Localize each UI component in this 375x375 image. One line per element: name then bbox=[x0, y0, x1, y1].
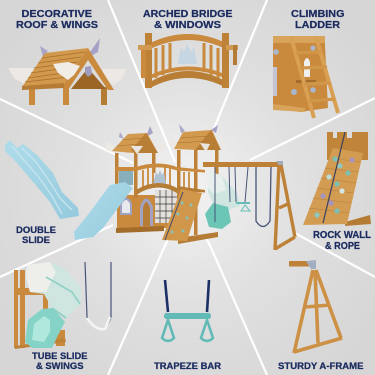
heading: decorative roof and wings bbox=[16, 9, 98, 31]
panel: tube slide and swings bbox=[14, 262, 111, 371]
heading: rock wall and rope bbox=[313, 230, 371, 252]
tube slide bbox=[205, 170, 240, 229]
icon: roof with wings bbox=[8, 38, 127, 105]
icon: rock wall bbox=[303, 132, 371, 226]
heading: double slide bbox=[16, 225, 57, 246]
heading: decorative roof and wings: DECORATIVE bbox=[22, 9, 92, 20]
heading: sturdy a-frame: STURDY A-FRAME bbox=[278, 361, 364, 371]
icon: trapeze bar bbox=[162, 280, 213, 341]
icon: double slide bbox=[5, 140, 79, 219]
heading: climbing ladder: LADDER bbox=[295, 20, 341, 31]
panel: decorative roof and wings bbox=[8, 9, 127, 105]
heading: rock wall and rope: ROCK WALL bbox=[313, 230, 371, 241]
roofs bbox=[105, 124, 227, 154]
heading: climbing ladder: CLIMBING bbox=[291, 9, 345, 20]
icon: ladder and wall bbox=[273, 36, 338, 118]
panel: sturdy a-frame bbox=[278, 260, 364, 371]
panel: arched bridge and windows bbox=[138, 9, 238, 88]
icon: swing bbox=[85, 262, 111, 329]
heading: arched bridge and windows bbox=[143, 9, 233, 31]
panel: rock wall and rope bbox=[303, 132, 371, 252]
heading: arched bridge and windows: ARCHED BRIDGE bbox=[143, 9, 233, 20]
heading: double slide: DOUBLE bbox=[16, 225, 57, 236]
bridge railing bbox=[116, 164, 205, 195]
panel: trapeze bar bbox=[154, 280, 221, 371]
panel: climbing ladder bbox=[273, 9, 345, 118]
icon: tube slide bbox=[14, 262, 81, 349]
heading: tube slide and swings: & SWINGS bbox=[36, 361, 84, 371]
heading: tube slide and swings bbox=[32, 351, 88, 371]
icon: playset center image bbox=[74, 124, 295, 250]
heading: tube slide and swings: TUBE SLIDE bbox=[32, 351, 88, 361]
icon: a-frame bbox=[289, 260, 342, 353]
heading: climbing ladder bbox=[291, 9, 345, 31]
heading: arched bridge and windows: & WINDOWS bbox=[154, 20, 221, 31]
rock wall bbox=[162, 189, 218, 244]
swing beam and a-frame bbox=[203, 161, 295, 250]
main blue slide bbox=[74, 182, 133, 240]
panel: double slide bbox=[5, 140, 79, 246]
heading: rock wall and rope: & ROPE bbox=[325, 241, 360, 252]
panel: center playset bbox=[74, 124, 295, 250]
heading: decorative roof and wings: ROOF & WINGS bbox=[16, 20, 98, 31]
heading: trapeze bar: TRAPEZE BAR bbox=[154, 361, 221, 371]
swings and trapeze bbox=[215, 167, 271, 226]
icon: arched bridge bbox=[138, 33, 238, 88]
tower walls bbox=[115, 150, 218, 240]
heading: double slide: SLIDE bbox=[22, 235, 51, 246]
